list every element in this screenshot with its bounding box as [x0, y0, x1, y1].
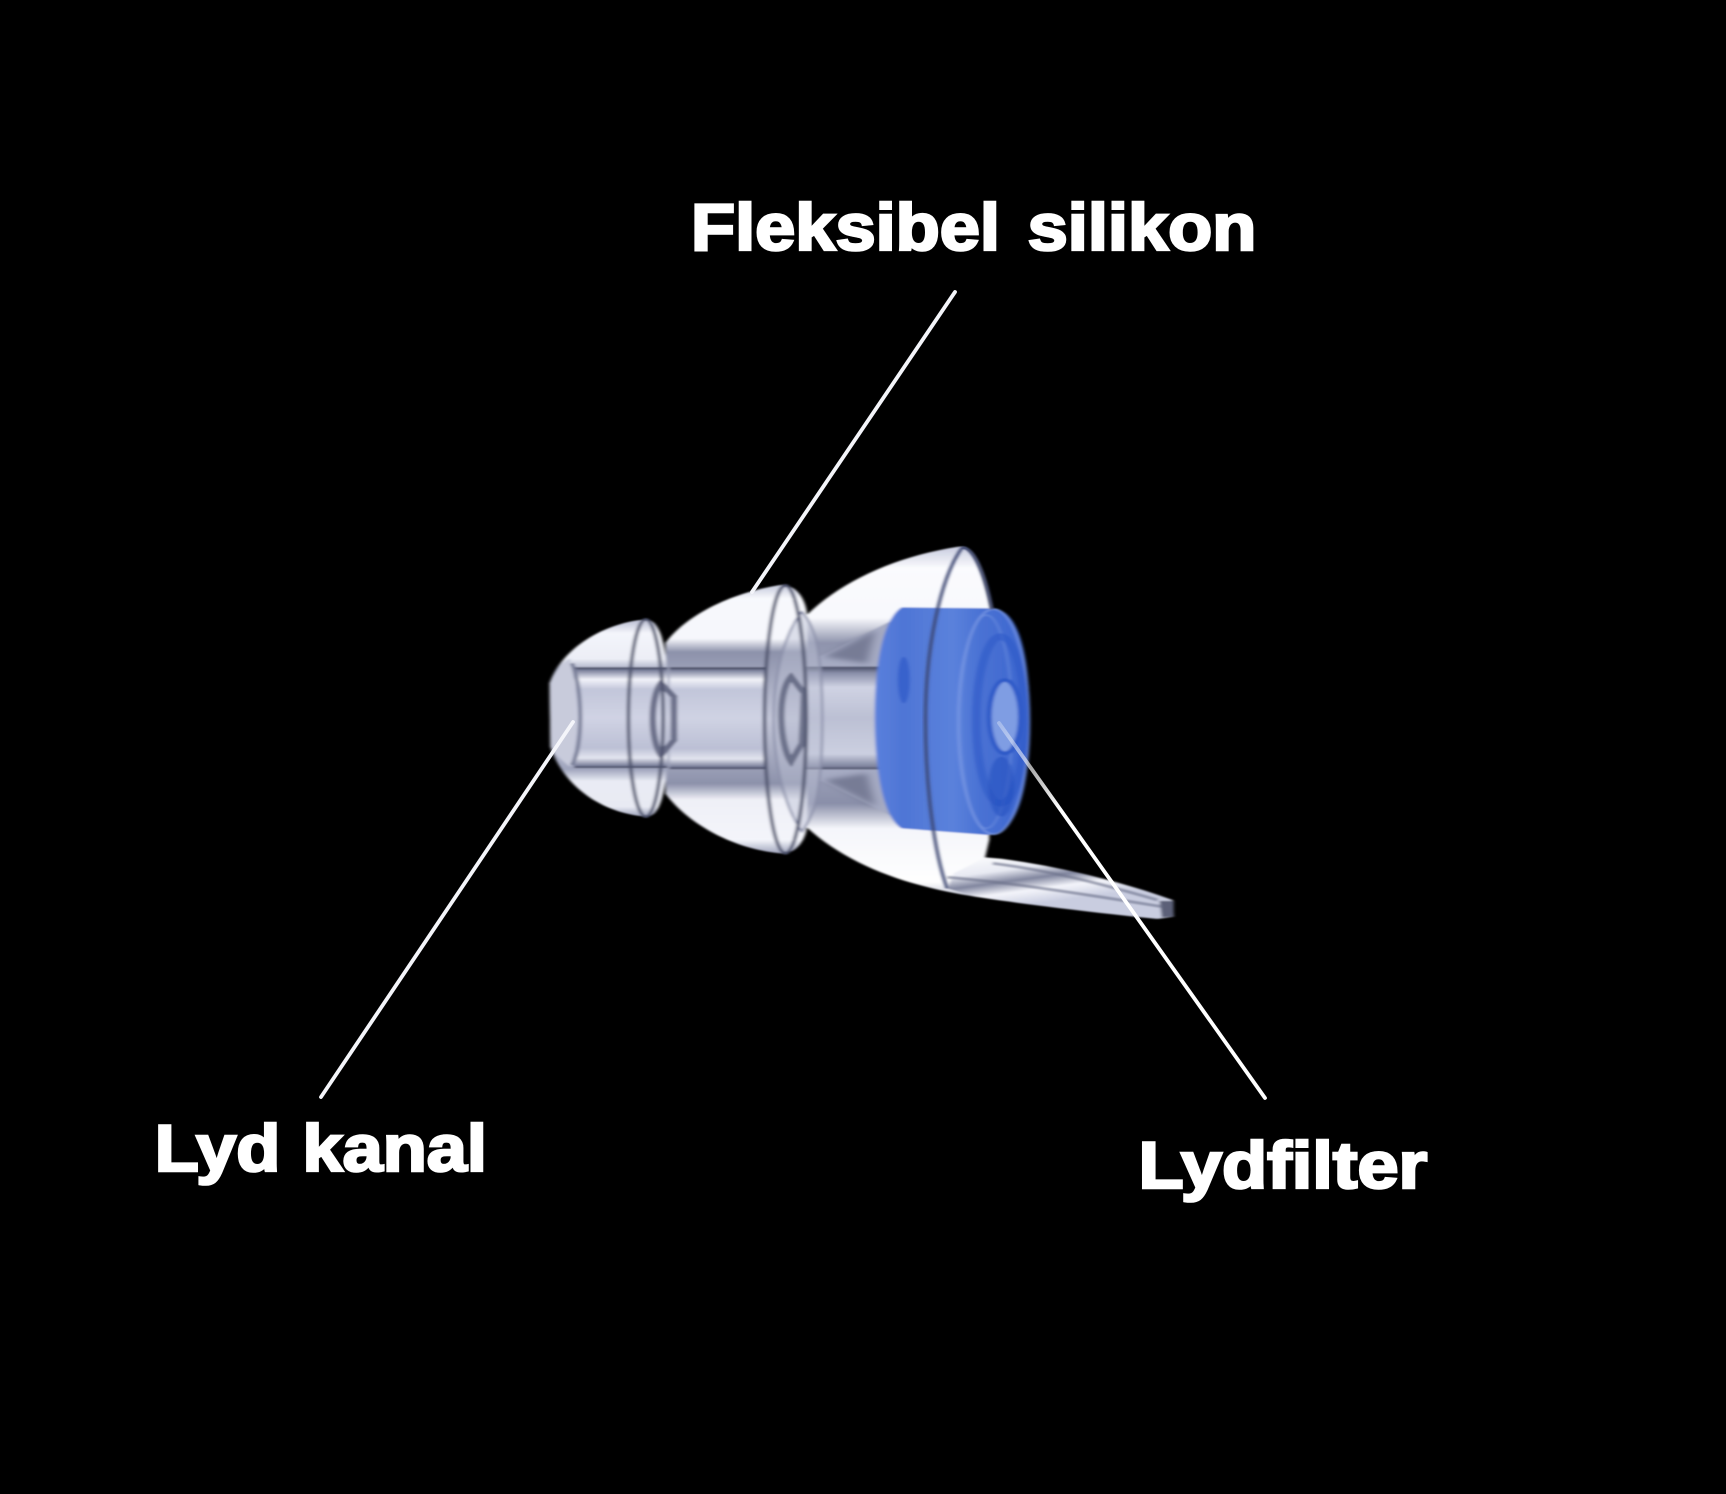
rear flange rim: [925, 547, 992, 888]
label: Lyd kanal: Lyd kanal: [155, 1111, 487, 1185]
leader line: Fleksibel silikon: [752, 292, 955, 592]
middle flange: [665, 585, 807, 853]
rear neck cone: [819, 620, 893, 817]
front dome: [549, 619, 668, 817]
rear neck shadows: [824, 630, 876, 807]
blue filter body: [875, 607, 1030, 835]
front tip: [549, 658, 576, 767]
middle flange rim: [765, 585, 806, 853]
tab crease: [947, 863, 1162, 907]
front core tube: [574, 667, 667, 768]
tab dark end: [1160, 901, 1174, 917]
middle core tube: [670, 667, 767, 769]
label: Fleksibel silikon: Fleksibel silikon: [691, 190, 1256, 264]
earplug illustration: [549, 547, 1174, 919]
rear core tube: [780, 667, 882, 769]
filter shadows: [898, 657, 910, 703]
filter face rings: [958, 609, 1029, 834]
rear flange: [802, 547, 992, 897]
front flange rim: [628, 619, 663, 817]
leader line: Lyd kanal: [321, 722, 573, 1097]
front neck detail: [653, 683, 674, 755]
retrieval tab: [947, 857, 1174, 919]
leader line: Lydfilter: [999, 723, 1265, 1098]
label: Lydfilter: Lydfilter: [1138, 1129, 1427, 1202]
rear flange front collar: [774, 612, 822, 832]
rear neck detail: [781, 677, 804, 762]
front inner ring: [572, 663, 580, 765]
